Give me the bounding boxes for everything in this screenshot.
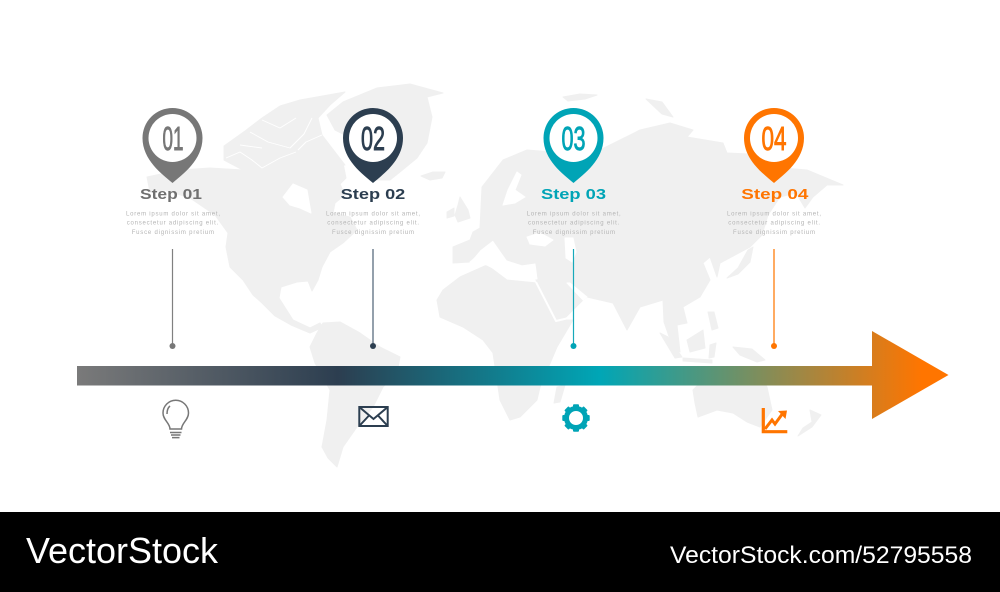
map: persian gulf — [567, 283, 587, 300]
map: borneo — [687, 330, 705, 352]
step 04 — [727, 108, 821, 432]
map: greenland — [327, 84, 443, 180]
map: caspian sea — [565, 238, 576, 262]
description step 02: consectetur adipiscing elit. — [327, 221, 419, 227]
connector 01 — [170, 249, 176, 349]
icon: gear — [562, 404, 590, 432]
pin 03 — [544, 108, 604, 183]
description step 01: Fusce dignissim pretium — [132, 230, 214, 236]
map: south america — [310, 322, 400, 467]
pin 02: 02 — [361, 120, 385, 157]
icon: envelope — [359, 407, 388, 426]
pin 04: 04 — [762, 120, 786, 157]
heading step 04: Step 04 — [741, 186, 809, 203]
map: sulawesi — [709, 343, 716, 358]
map: red sea — [536, 282, 577, 321]
timeline arrow — [77, 331, 948, 419]
description step 02: Lorem ipsum dolor sit amet, — [326, 212, 420, 218]
map: japan — [727, 247, 753, 278]
pin 03: 03 — [562, 120, 586, 157]
footer url: VectorStock.com/52795558 — [670, 542, 972, 569]
map: hudson bay — [283, 184, 311, 213]
map: arctic archipelago — [224, 92, 345, 172]
step 02 — [326, 108, 420, 426]
heading step 02: Step 02 — [341, 186, 405, 203]
map: new guinea — [733, 347, 765, 362]
map: baltic sea — [503, 172, 525, 205]
description step 03: consectetur adipiscing elit. — [528, 221, 620, 227]
map: java — [683, 358, 712, 363]
map: africa — [437, 265, 573, 420]
map: eurasia — [453, 123, 843, 352]
pin 02 — [343, 108, 403, 183]
footer logo: VectorStock — [26, 530, 219, 571]
heading step 03: Step 03 — [541, 186, 606, 203]
description step 04: Lorem ipsum dolor sit amet, — [727, 212, 821, 218]
step 03 — [527, 108, 621, 432]
map: madagascar — [554, 385, 565, 403]
map: iceland — [421, 172, 445, 180]
description step 01: consectetur adipiscing elit. — [127, 221, 219, 227]
map: sumatra — [660, 333, 682, 358]
footer band — [0, 512, 1000, 592]
description step 04: Fusce dignissim pretium — [733, 230, 815, 236]
description step 03 — [527, 212, 621, 236]
heading step 01: Step 01 — [140, 186, 202, 203]
description step 04: consectetur adipiscing elit. — [728, 221, 820, 227]
map: new zealand — [798, 410, 821, 436]
map: australia — [693, 368, 772, 427]
connector 04 — [771, 249, 777, 349]
connector 02 — [370, 249, 376, 349]
map: novaya zemlya — [646, 99, 673, 117]
map: ireland — [447, 208, 454, 218]
description step 03: Lorem ipsum dolor sit amet, — [527, 212, 621, 218]
pin 01: 01 — [162, 120, 184, 157]
map: arctic channels — [226, 118, 322, 168]
description step 01: Lorem ipsum dolor sit amet, — [126, 212, 220, 218]
map: britain — [455, 197, 470, 222]
icon: light bulb — [163, 400, 188, 438]
map: mediterranean sea — [470, 247, 537, 279]
description step 01 — [126, 212, 220, 236]
world map background — [147, 84, 843, 467]
icon: growth chart — [763, 408, 787, 432]
pin 01 — [142, 108, 202, 183]
map: svalbard — [563, 94, 597, 101]
description step 02 — [326, 212, 420, 236]
description step 03: Fusce dignissim pretium — [533, 230, 615, 236]
step 01 — [126, 108, 220, 438]
connector 03 — [570, 249, 576, 349]
map: north america — [147, 145, 357, 333]
description step 02: Fusce dignissim pretium — [332, 230, 414, 236]
pin 04 — [744, 108, 804, 183]
map: black sea — [527, 233, 553, 246]
description step 04 — [727, 212, 821, 236]
map: philippines — [708, 312, 718, 330]
